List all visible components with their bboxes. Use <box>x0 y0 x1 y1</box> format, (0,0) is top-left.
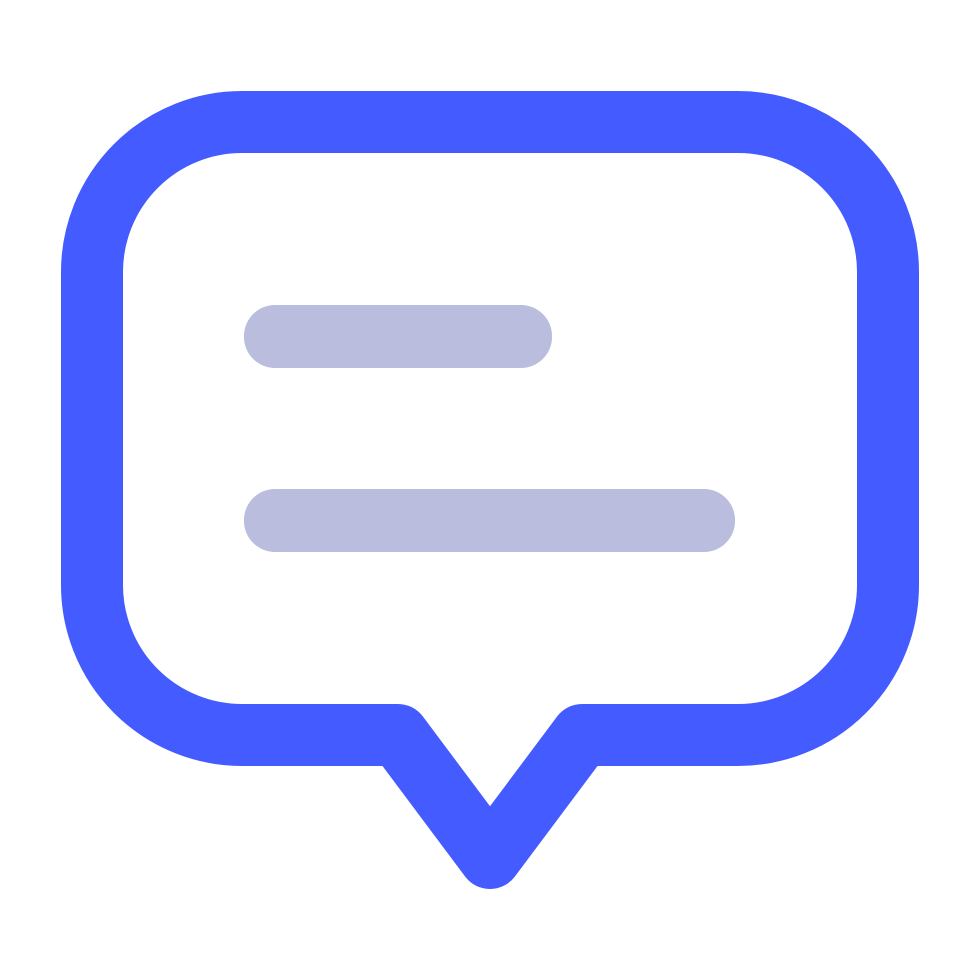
icon: speech bubble <box>92 122 888 858</box>
bubble outline <box>92 122 888 858</box>
long text line <box>244 489 735 552</box>
short text line <box>244 305 552 368</box>
